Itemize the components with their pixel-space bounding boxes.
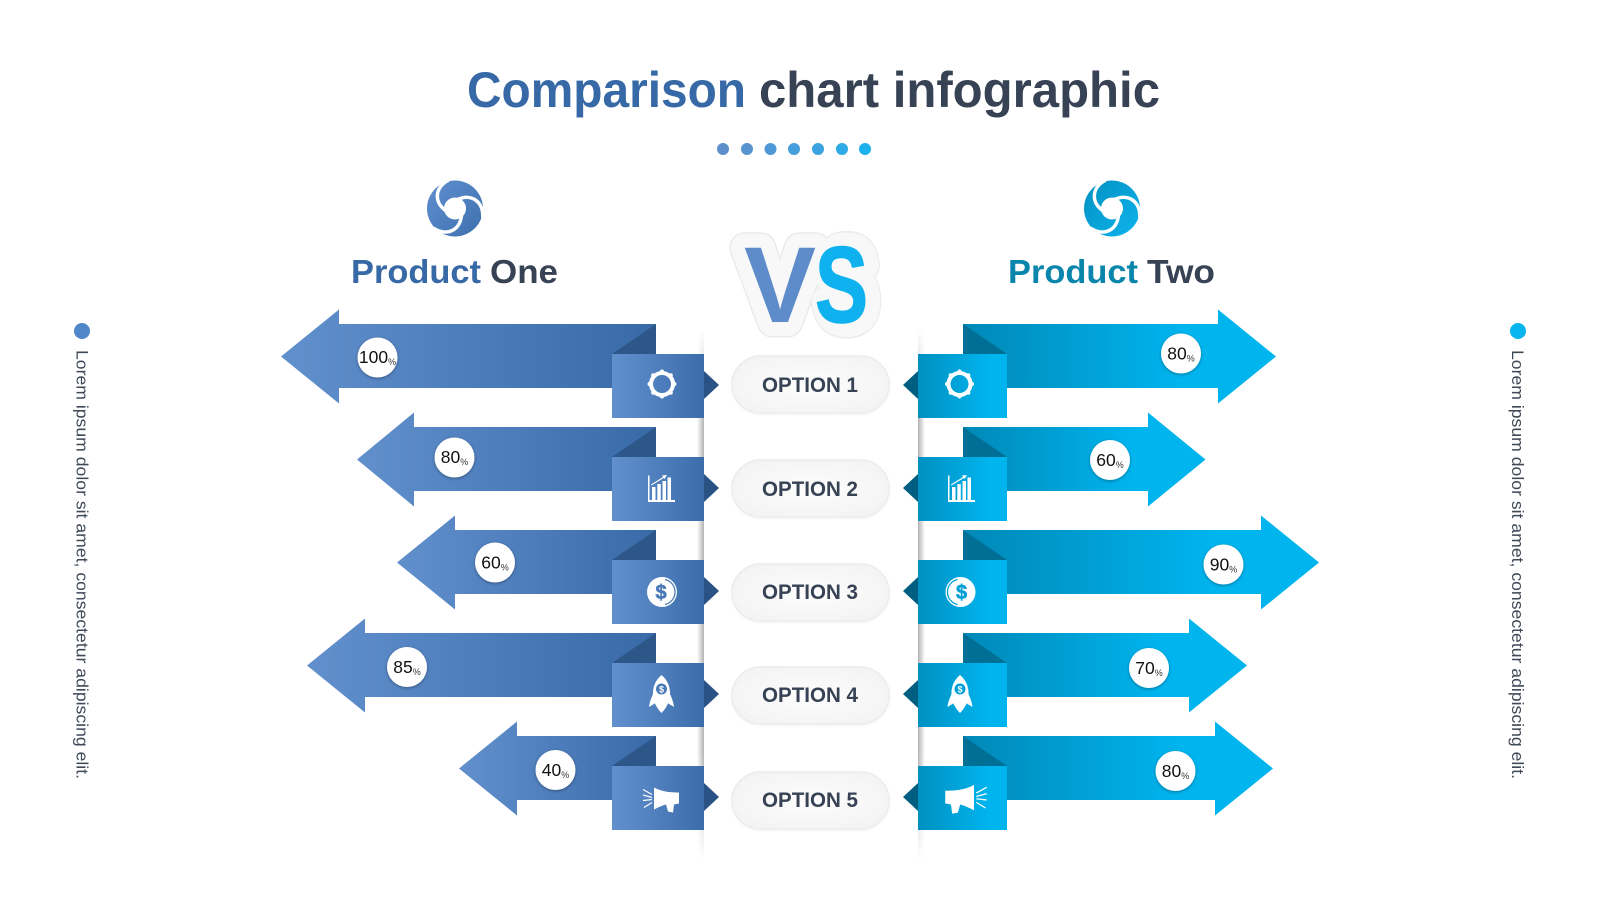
VS badge: S bbox=[815, 224, 868, 345]
badge: 60%: % bbox=[501, 562, 509, 572]
row 4: left arrow 85% bbox=[307, 618, 719, 727]
icon: dollar right bbox=[946, 577, 976, 607]
dotted divider bbox=[717, 143, 871, 155]
badge: 90% bbox=[1204, 544, 1244, 584]
badge: 70% bbox=[1129, 648, 1169, 688]
badge: 60% bbox=[1090, 440, 1130, 480]
VS badge: V bbox=[744, 224, 816, 345]
VS badge: S bbox=[820, 224, 873, 345]
icon: rocket right: $ bbox=[957, 684, 963, 694]
badge: 100%: % bbox=[388, 357, 396, 367]
icon: gear left bbox=[648, 370, 676, 398]
icon: chart right bbox=[948, 475, 975, 502]
row 2: left arrow 80% bbox=[357, 412, 719, 521]
icon: gear right bbox=[945, 370, 974, 398]
row 3: option pill: OPTION 3 bbox=[762, 581, 858, 604]
row 1: option pill bbox=[732, 356, 889, 413]
logo: product two bbox=[1084, 180, 1145, 238]
icon: rocket left: $ bbox=[659, 684, 664, 694]
badge: 80%: 80 bbox=[1167, 344, 1187, 364]
badge: 80%: 80 bbox=[1162, 761, 1181, 781]
row 3: option pill bbox=[732, 564, 889, 621]
row 4: option pill bbox=[732, 667, 889, 724]
heading: product two bbox=[1008, 253, 1215, 290]
badge: 60%: % bbox=[1116, 460, 1124, 470]
side note: left: Lorem ipsum dolor sit amet, consectetur adipiscing elit. bbox=[72, 350, 92, 779]
icon: dollar left bbox=[647, 577, 677, 607]
row 1: left arrow 100% bbox=[281, 310, 719, 418]
title: chart infographic bbox=[759, 62, 1160, 118]
logo: product one bbox=[427, 180, 488, 238]
badge: 60% bbox=[475, 542, 515, 582]
badge: 40%: % bbox=[561, 770, 569, 780]
row 3: right arrow 90% bbox=[903, 516, 1319, 624]
badge: 85% bbox=[387, 647, 427, 687]
icon: rocket right bbox=[948, 675, 972, 713]
heading: product two: Two bbox=[1147, 253, 1215, 290]
badge: 70%: % bbox=[1155, 668, 1163, 678]
heading: product one: One bbox=[490, 253, 558, 290]
badge: 60%: 60 bbox=[1096, 450, 1116, 470]
icon: dollar right: $ bbox=[956, 582, 967, 604]
badge: 80% bbox=[1156, 751, 1196, 791]
icon: megaphone right bbox=[945, 785, 987, 814]
row 2: option pill bbox=[732, 460, 889, 517]
title bbox=[467, 62, 1160, 118]
badge: 90%: 90 bbox=[1210, 554, 1229, 574]
row 5: right arrow 80% bbox=[903, 722, 1273, 830]
badge: 80%: 80 bbox=[441, 447, 460, 467]
heading: product two: Product bbox=[1008, 253, 1138, 290]
row 2: right arrow 60% bbox=[903, 412, 1206, 521]
row 1: right arrow 80% bbox=[903, 310, 1276, 418]
badge: 90%: % bbox=[1229, 564, 1237, 574]
icon: dollar left: $ bbox=[655, 582, 667, 604]
title: Comparison bbox=[467, 62, 746, 118]
badge: 85%: % bbox=[413, 667, 421, 677]
VS badge: V bbox=[744, 224, 816, 345]
row 1: option pill: OPTION 1 bbox=[762, 374, 858, 397]
VS badge: V bbox=[744, 224, 816, 345]
badge: 100% bbox=[358, 338, 398, 378]
row 2: option pill: OPTION 2 bbox=[762, 478, 858, 501]
row 4: option pill: OPTION 4 bbox=[762, 684, 858, 707]
heading: product one bbox=[351, 253, 558, 290]
badge: 60%: 60 bbox=[481, 552, 501, 572]
side note: right: Lorem ipsum dolor sit amet, consectetur adipiscing elit. bbox=[1508, 350, 1527, 779]
row 5: option pill: OPTION 5 bbox=[762, 789, 858, 812]
badge: 40%: 40 bbox=[542, 760, 561, 780]
heading: product one: Product bbox=[351, 253, 481, 290]
badge: 40% bbox=[536, 750, 576, 790]
row 5: option pill bbox=[732, 772, 889, 829]
icon: chart left bbox=[648, 475, 675, 502]
row 4: right arrow 70% bbox=[903, 618, 1247, 727]
center panel bbox=[697, 330, 925, 860]
badge: 100%: 100 bbox=[359, 347, 388, 367]
badge: 80% bbox=[434, 438, 474, 478]
badge: 80%: % bbox=[460, 457, 468, 467]
VS badge bbox=[744, 224, 873, 345]
row 5: left arrow 40% bbox=[459, 722, 719, 830]
badge: 80% bbox=[1161, 334, 1201, 374]
badge: 85%: 85 bbox=[393, 657, 413, 677]
badge: 80%: % bbox=[1187, 354, 1195, 364]
icon: megaphone left bbox=[643, 788, 679, 812]
VS badge: S bbox=[820, 224, 873, 345]
row 3: left arrow 60% bbox=[397, 516, 719, 624]
badge: 70%: 70 bbox=[1135, 658, 1155, 678]
icon: rocket left bbox=[649, 675, 674, 713]
badge: 80%: % bbox=[1181, 771, 1189, 781]
